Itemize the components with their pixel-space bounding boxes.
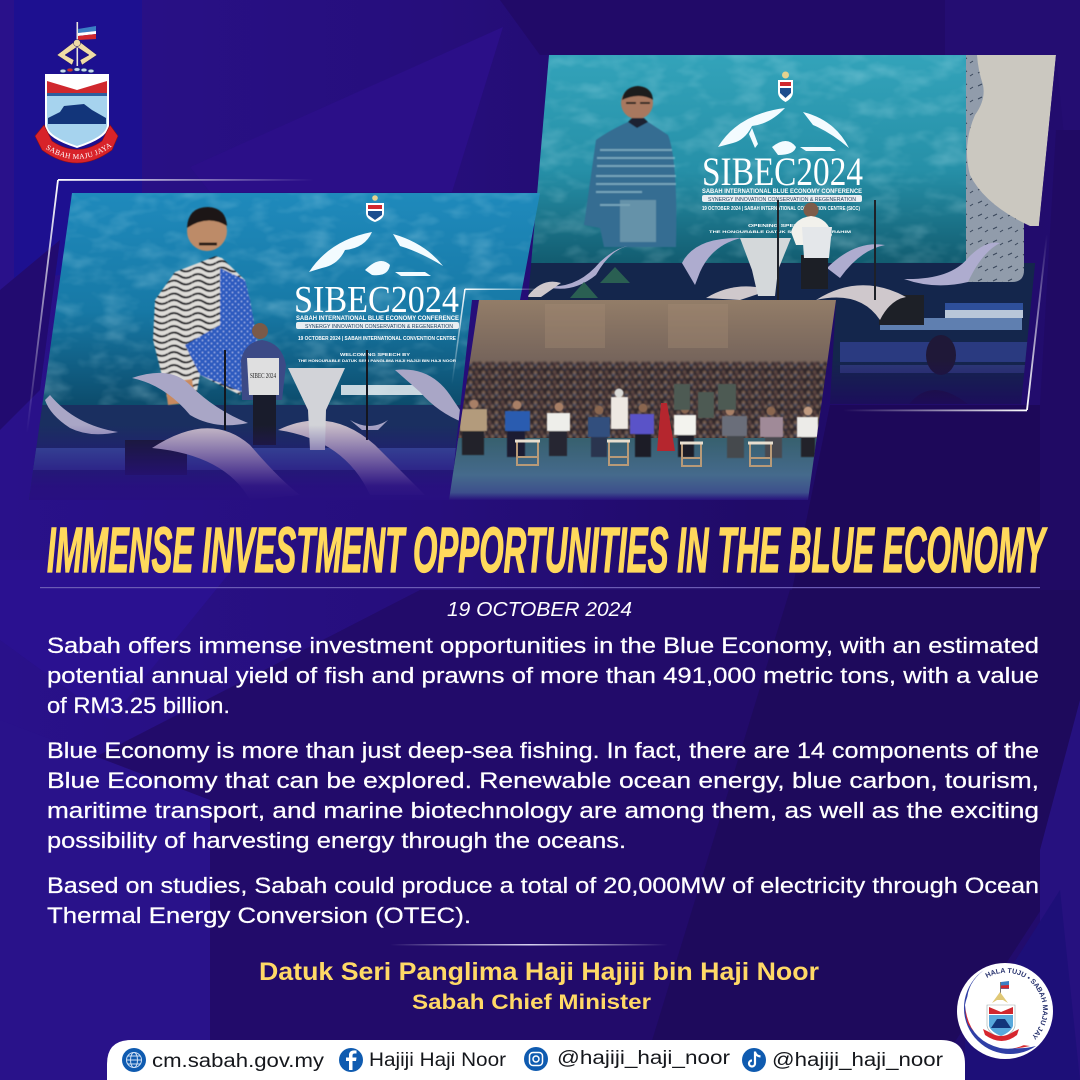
theme strip [702,195,862,202]
microphone stands [225,350,367,440]
stage [29,405,460,499]
speaker at podium [791,202,832,289]
stage waves [45,370,470,434]
blue swoosh [964,970,1036,1054]
divider [40,587,1040,588]
conference subtitle: SABAH INTERNATIONAL BLUE ECONOMY CONFERENCE [296,316,459,322]
opening speech text: OPENING SPEECH [748,223,808,228]
emblem on screen [778,72,793,102]
theme strip: SYNERGY INNOVATION CONSERVATION & REGENERATION [305,324,453,330]
SIBEC 2024 wordmark: SIBEC2024 [702,149,863,194]
paragraph 1 [47,633,1039,718]
signature divider [390,944,668,946]
lectern table [740,238,791,296]
opening speech text: THE HONOURABLE DATUK SERI ANWAR IBRAHIM [709,229,852,234]
red swoosh [965,1002,1030,1048]
opening speech text [709,224,851,233]
stage [528,263,1035,404]
plants [570,267,630,298]
motto text: SABAH MAJU JAYA [46,144,112,159]
speaker at podium: SIBEC 2024 [250,372,276,380]
foreground waves [152,420,416,487]
portrait: Hajiji [153,207,258,405]
icon: flag [76,22,96,66]
facebook text: Hajiji Haji Noor [369,1050,507,1071]
paragraph 2: Blue Economy is more than just deep-sea fishing. In fact, there are 14 components of the [47,738,1039,763]
icon: shield [45,74,109,148]
paragraph 1: potential annual yield of fish and prawns of more than 491,000 metric tons, with a value [47,663,1039,688]
paragraph 3: Thermal Energy Conversion (OTEC). [47,903,471,928]
paragraph 2 [47,738,1039,853]
theme strip: SYNERGY INNOVATION CONSERVATION & REGENERATION [708,197,856,203]
lectern table [288,368,345,450]
icon: beads [60,68,94,73]
paragraph 1: of RM3.25 billion. [47,693,230,718]
globe graphic [718,108,849,155]
paragraph 2: maritime transport, and marine biotechnology are among them, as well as the exciting [47,798,1039,823]
welcome speech text [298,353,456,362]
LED screen [20,193,545,405]
theme strip [296,322,459,329]
audience crowd [449,362,839,444]
wall and curtain [966,55,1056,282]
icon: website [122,1048,146,1072]
globe graphic [309,232,443,276]
carpet floor [449,438,839,500]
foreground pale waves [527,282,906,320]
frame line: photo 1 [27,179,314,433]
frame line: photo 2 [843,234,1047,411]
frame line: photo 3 [452,288,545,384]
welcome speech text: THE HONOURABLE DATUK SERI PANGLIMA HAJI HAJIJI BIN HAJI NOOR [298,358,456,363]
white inner disc [965,973,1045,1049]
icon: facebook [339,1048,363,1072]
welcome speech text: WELCOMING SPEECH BY [340,352,410,357]
icon: ribbon with motto [34,124,118,164]
sponsor strip [341,385,423,395]
photo: Prime Minister on stage [520,55,1060,413]
instagram text: @hajiji_haji_noor [557,1048,731,1069]
conference subtitle: SABAH INTERNATIONAL BLUE ECONOMY CONFERENCE [702,189,862,195]
paragraph 1: Sabah offers immense investment opportunities in the Blue Economy, with an estimated [47,633,1039,658]
photo: audience [449,300,839,500]
LED screen [520,55,970,263]
tiktok text: @hajiji_haji_noor [772,1050,944,1071]
front row guests [460,384,818,458]
event date text: 19 OCTOBER 2024 | SABAH INTERNATIONAL CONVENTION CENTRE [298,336,456,342]
paragraph 3 [47,873,1039,928]
paragraph 2: possibility of harvesting energy through the oceans. [47,828,626,853]
icon: arms [57,40,97,65]
coffee tables [515,441,773,466]
website text: cm.sabah.gov.my [152,1051,325,1072]
paragraph 3: Based on studies, Sabah could produce a total of 20,000MW of electricity through Ocean [47,873,1039,898]
microphone stands [778,200,875,300]
photo: Chief Minister on stage [20,193,545,505]
icon: instagram [524,1047,548,1071]
crest: Sabah coat of arms [34,22,118,164]
emblem on screen [366,195,384,222]
bottom fade [830,369,1024,404]
name: Datuk Seri Panglima Haji Hajiji bin Haji Noor [259,958,819,986]
icon: tiktok [742,1048,766,1072]
hall wall [449,300,839,366]
red carpet [657,403,675,451]
stage waves [540,238,1000,289]
SIBEC 2024 wordmark: SIBEC2024 [294,279,459,321]
speaker at podium [241,323,286,445]
bottom fade [29,428,456,500]
event date text: 19 OCTOBER 2024 | SABAH INTERNATIONAL CONVENTION CENTRE (SICC) [702,206,860,212]
paragraph 2: Blue Economy that can be explored. Renewable ocean energy, blue carbon, tourism, [47,768,1039,793]
arc text: HALA TUJU • SABAH MAJU JAYA [985,968,1048,1040]
role: Sabah Chief Minister [412,990,652,1014]
contact bar [107,1040,965,1080]
date: 19 OCTOBER 2024 [447,599,632,621]
portrait: Anwar [584,86,676,247]
mini crest [983,981,1019,1041]
